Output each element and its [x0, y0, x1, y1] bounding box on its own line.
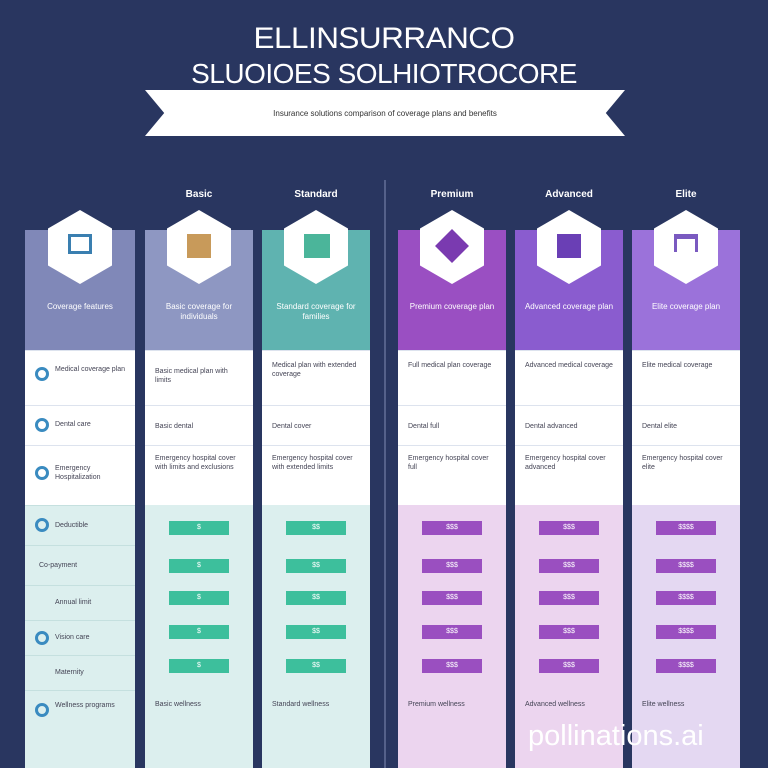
panel: plan 2: $$ [312, 662, 320, 669]
panel: plan 2: Dental cover [272, 423, 311, 430]
panel: plan 3: Premium wellness [408, 701, 465, 708]
panel: plan 2: Standard coverage for families [276, 302, 356, 321]
panel: plan 4: Advanced medical coverage [525, 362, 613, 369]
panel: plan 5: Elite coverage plan [652, 302, 720, 311]
panel: plan 5: $$$$ [678, 524, 694, 531]
column headers: Basic [186, 189, 212, 200]
panel: plan 3: Full medical plan coverage [408, 362, 491, 369]
ribbon banner [145, 90, 625, 136]
panel: feature labels: Emergency Hospitalization [55, 465, 101, 481]
panel: plan 1: Basic dental [155, 423, 193, 430]
panel: plan 5: Elite medical coverage [642, 362, 712, 369]
panel: plan 2: $$ [312, 594, 320, 601]
title: ELLINSURRANCO [254, 22, 514, 55]
panel: plan 1 [145, 230, 253, 768]
panel: plan 4: Dental advanced [525, 423, 578, 430]
panel: plan 4: $$$ [563, 562, 575, 569]
panel: feature labels: Annual limit [55, 599, 91, 606]
panel: plan 1: $ [197, 662, 201, 669]
panel: plan 4: $$$ [563, 662, 575, 669]
panel: feature labels: Dental care [55, 421, 91, 428]
panel: plan 5: Elite wellness [642, 701, 684, 708]
panel: plan 5: $$$$ [678, 594, 694, 601]
watermark: pollinations.ai [528, 720, 704, 752]
panel: plan 3: $$$ [446, 594, 458, 601]
panel: plan 3: $$$ [446, 562, 458, 569]
panel: plan 3: $$$ [446, 524, 458, 531]
panel: plan 2 [262, 230, 370, 768]
panel: plan 2: $$ [312, 562, 320, 569]
panel: plan 1: Basic coverage for individuals [166, 302, 232, 321]
panel: plan 3: Premium coverage plan [410, 302, 494, 311]
ribbon banner: Insurance solutions comparison of coverage plans and benefits [273, 109, 497, 118]
panel: plan 2: $$ [312, 524, 320, 531]
panel: feature labels: Coverage features [47, 302, 113, 311]
panel: plan 1: $ [197, 524, 201, 531]
panel: plan 5: $$$$ [678, 562, 694, 569]
panel: plan 2: Medical plan with extended coverage [272, 362, 356, 378]
panel: plan 4: $$$ [563, 628, 575, 635]
panel: plan 1: $ [197, 594, 201, 601]
panel: plan 4: $$$ [563, 594, 575, 601]
panel: plan 5: Emergency hospital cover elite [642, 455, 723, 471]
panel: plan 3: $$$ [446, 628, 458, 635]
column headers: Elite [675, 189, 697, 200]
panel: plan 3: $$$ [446, 662, 458, 669]
panel: plan 4: Advanced coverage plan [525, 302, 613, 311]
panel: plan 5: $$$$ [678, 628, 694, 635]
panel: feature labels [25, 230, 135, 768]
panel: feature labels: Deductible [55, 522, 88, 529]
panel: plan 1: Emergency hospital cover with limits and exclusions [155, 455, 236, 471]
panel: plan 2: Standard wellness [272, 701, 329, 708]
panel: plan 4: $$$ [563, 524, 575, 531]
panel: plan 5: Dental elite [642, 423, 677, 430]
panel: plan 2: Emergency hospital cover with extended limits [272, 455, 353, 471]
panel: plan 1: $ [197, 628, 201, 635]
panel: plan 1: $ [197, 562, 201, 569]
panel: plan 3: Dental full [408, 423, 439, 430]
subtitle: SLUOIOES SOLHIOTROCORE [191, 58, 577, 89]
panel: plan 4: Emergency hospital cover advanced [525, 455, 606, 471]
panel: plan 2: $$ [312, 628, 320, 635]
panel: plan 3: Emergency hospital cover full [408, 455, 489, 471]
panel: plan 4 [515, 230, 623, 768]
column headers: Standard [294, 189, 338, 200]
panel: plan 5 [632, 230, 740, 768]
panel: plan 5: $$$$ [678, 662, 694, 669]
panel: feature labels: Medical coverage plan [55, 366, 125, 373]
panel: feature labels: Vision care [55, 634, 90, 641]
panel: plan 3 [398, 230, 506, 768]
panel: feature labels: Wellness programs [55, 702, 115, 709]
panel: feature labels: Co-payment [39, 562, 77, 569]
column headers: Advanced [545, 189, 593, 200]
divider [384, 180, 386, 768]
column headers [186, 189, 697, 200]
panel: feature labels: Maternity [55, 669, 84, 676]
column headers: Premium [431, 189, 473, 200]
panel: plan 1: Basic wellness [155, 701, 201, 708]
panel: plan 4: Advanced wellness [525, 701, 585, 708]
panel: plan 1: Basic medical plan with limits [155, 368, 228, 384]
